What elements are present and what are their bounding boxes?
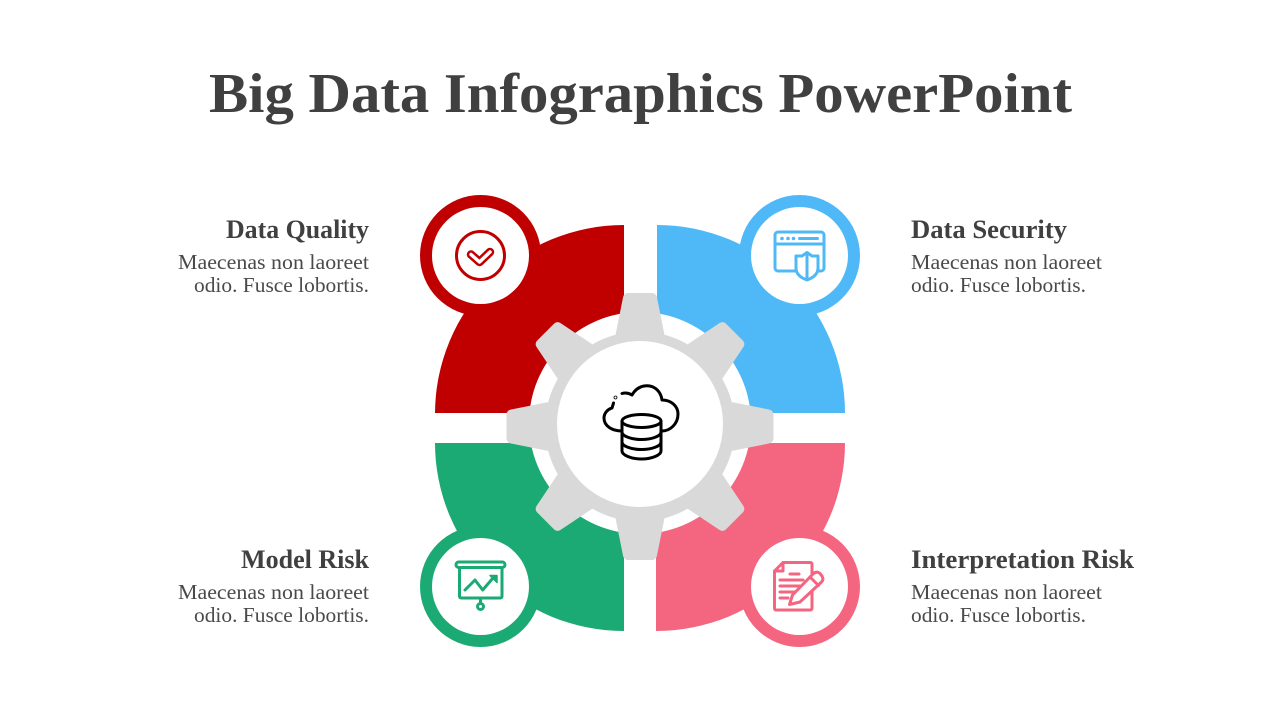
title: Big Data Infographics PowerPoint [209,63,1072,125]
body: data security [911,250,1102,297]
body: data security: odio. Fusce lobortis. [911,273,1086,297]
body: data quality [178,250,369,297]
text block: interpretation risk [911,545,1135,627]
body: interpretation risk [911,580,1102,627]
body: model risk: Maecenas non laoreet [178,580,369,604]
icon badge: interpretation risk [739,526,860,647]
segment: model risk green [435,443,624,631]
body: model risk: odio. Fusce lobortis. [194,603,369,627]
text block: data security [911,215,1102,297]
heading: data quality: Data Quality [226,215,369,244]
icon badge: data quality [420,195,541,316]
body: interpretation risk: odio. Fusce lobortis. [911,603,1086,627]
heading: model risk: Model Risk [241,545,370,574]
body: model risk [178,580,369,627]
segment: interpretation risk pink [656,443,845,631]
heading: interpretation risk: Interpretation Risk [911,545,1135,574]
segment: data security blue [657,225,845,413]
body: data quality: odio. Fusce lobortis. [194,273,369,297]
icon badge: data security [739,195,860,316]
center white disc [529,312,751,534]
segment: data quality red [435,225,624,413]
body: data quality: Maecenas non laoreet [178,250,369,274]
panel: quarter segments [435,225,845,631]
heading: data security: Data Security [911,215,1067,244]
icon: cloud database [604,386,678,459]
text block: data quality [178,215,369,297]
text block: model risk [178,545,370,627]
icon badge: model risk [420,526,541,647]
body: interpretation risk: Maecenas non laoreet [911,580,1102,604]
gear [512,298,768,555]
body: data security: Maecenas non laoreet [911,250,1102,274]
